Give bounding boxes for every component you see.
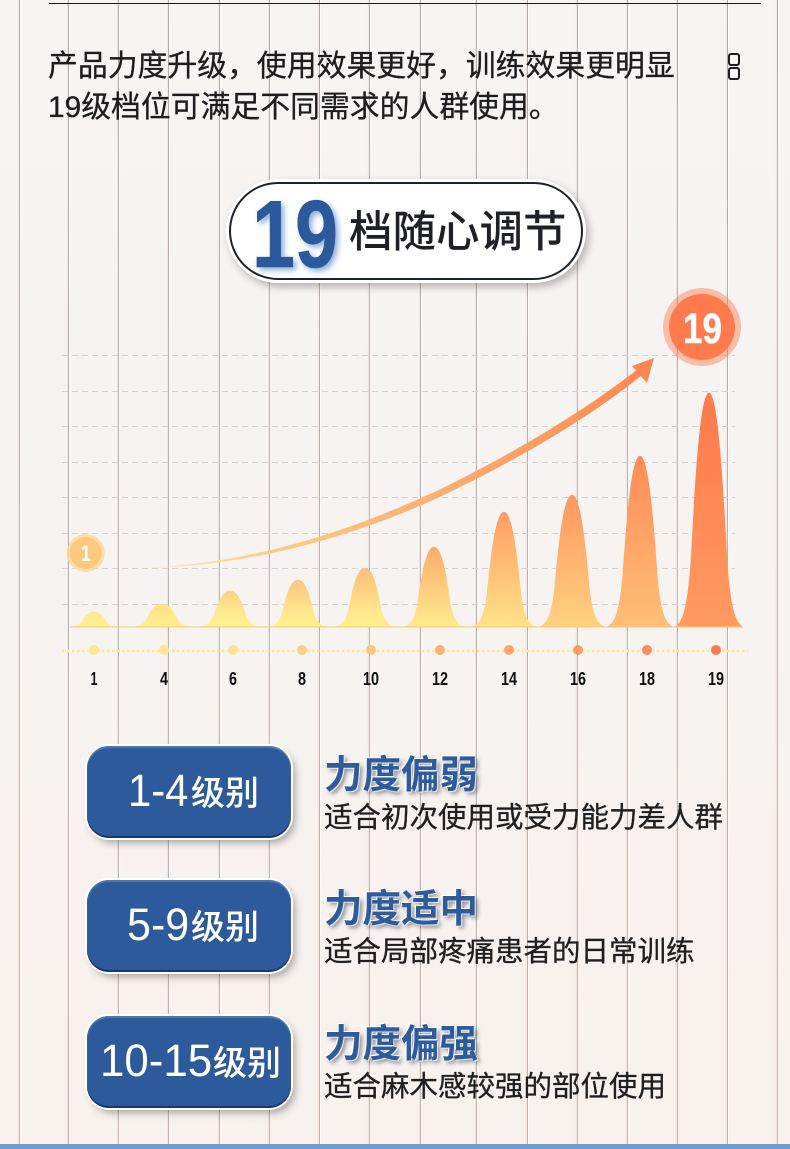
intro text	[48, 50, 675, 124]
badge: level 1: 1	[81, 541, 91, 566]
button: level 5-9: 5-9	[127, 899, 189, 950]
level axis labels	[90, 669, 724, 689]
button: level 10-15: 10-15	[100, 1035, 212, 1086]
level axis labels: 12	[432, 669, 448, 689]
level axis labels: 8	[298, 669, 306, 689]
bottom bar	[0, 1144, 790, 1149]
badge: level 1	[67, 534, 105, 572]
level axis dots	[62, 645, 748, 655]
big number 19: 19	[252, 181, 338, 288]
button: level 5-9: 级别	[191, 909, 259, 947]
heading text: 档随心调节	[349, 209, 566, 257]
level axis labels: 16	[570, 669, 586, 689]
description: strong force: 适合麻木感较强的部位使用	[324, 1071, 666, 1103]
intro text: 19级档位可满足不同需求的人群使用。	[48, 91, 559, 124]
heading pill: 19 levels adjustable	[229, 182, 583, 280]
growth chart	[62, 288, 748, 689]
level axis labels: 1	[90, 669, 98, 689]
level axis labels: 18	[639, 669, 655, 689]
badge: level 19: 19	[683, 305, 722, 353]
heading: strong force: 力度偏强	[324, 1023, 478, 1066]
level axis labels: 6	[229, 669, 237, 689]
level axis labels: 10	[363, 669, 379, 689]
level axis labels: 4	[160, 669, 168, 689]
level axis labels: 19	[708, 669, 724, 689]
arrow rising from level 1 to 19	[140, 358, 654, 568]
intro text: 产品力度升级，使用效果更好，训练效果更明显	[48, 50, 675, 83]
button: level 5-9	[87, 880, 291, 972]
heading: weak force: 力度偏弱	[324, 754, 478, 797]
button: level 1-4: 1-4	[128, 765, 188, 816]
bell curves	[70, 393, 743, 627]
heading: moderate force: 力度适中	[324, 888, 478, 931]
button: level 10-15: 级别	[213, 1045, 281, 1083]
level axis labels: 14	[501, 669, 517, 689]
description: moderate force: 适合局部疼痛患者的日常训练	[324, 936, 695, 968]
icon: small double square glyph	[728, 53, 740, 80]
description: weak force: 适合初次使用或受力能力差人群	[324, 802, 723, 834]
button: level 10-15	[87, 1016, 291, 1108]
badge: level 19	[663, 288, 741, 366]
button: level 1-4	[87, 746, 291, 838]
button: level 1-4: 级别	[191, 775, 259, 813]
